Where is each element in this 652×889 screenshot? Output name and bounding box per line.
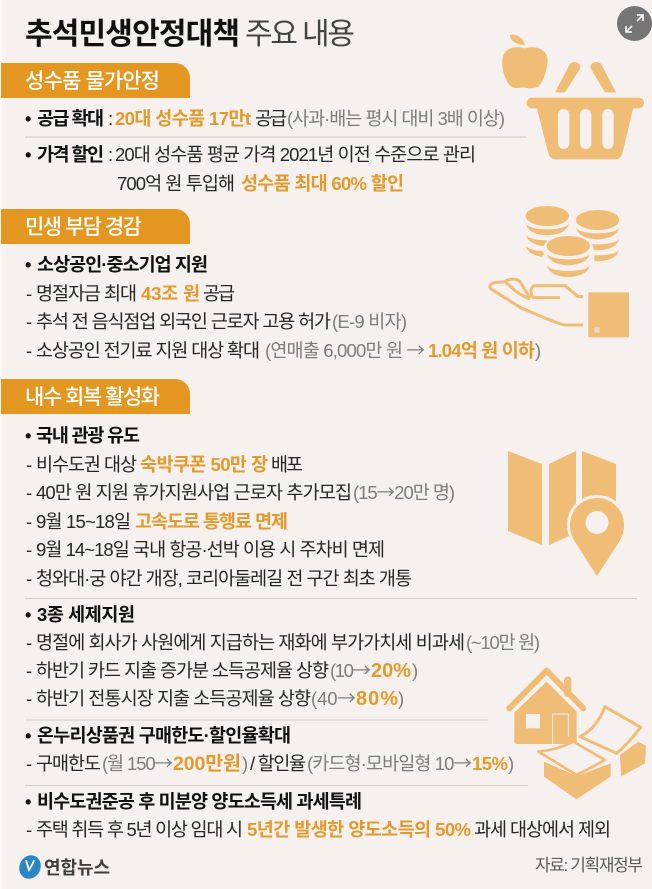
item: 공급 확대: 공급 확대	[37, 108, 104, 129]
item: 공급 확대: 공급	[255, 108, 287, 129]
icon: coins and hand	[490, 206, 629, 337]
item: 공급 확대: •	[25, 108, 31, 129]
item: 국내 관광 유도: 배포	[271, 454, 303, 475]
item: 국내 관광 유도: 청와대·궁 야간 개장, 코리아둘레길 전 구간 최초 개통	[36, 568, 412, 589]
section heading	[1, 209, 190, 244]
item: 소상공인·중소기업 지원: 추석 전 음식점업 외국인 근로자 고용 허가	[36, 311, 331, 332]
item: 온누리상품권: •	[25, 725, 31, 746]
panel: 민생 부담 경감	[1, 206, 629, 363]
item: 3종 세제지원: 명절에 회사가 사원에게 지급하는 재화에 부가가치세 비과세	[36, 632, 465, 653]
title: 주요 내용	[245, 18, 355, 51]
icon: house and documents	[509, 671, 646, 799]
item: 공급 확대: :	[108, 108, 113, 129]
item: 국내 관광 유도: 9월 14~18일 국내 항공·선박 이용 시 주차비 면제	[36, 539, 385, 560]
item: 소상공인·중소기업 지원: 소상공인 전기료 지원 대상 확대	[36, 340, 260, 361]
item: 비수도권 양도소득세 과세특례: -	[26, 819, 32, 840]
item: 국내 관광 유도: 비수도권 대상	[36, 454, 137, 475]
icon: apple and basket	[502, 35, 644, 159]
item: 온누리상품권: 온누리상품권 구매한도·할인율확대	[37, 725, 291, 746]
item: 온누리상품권	[25, 725, 514, 776]
item: 온누리상품권: (카드형·모바일형 10→	[307, 750, 472, 776]
panel: 성수품 물가안정	[1, 35, 644, 194]
panel: 내수 회복 활성화	[1, 379, 646, 840]
item: 국내 관광 유도: 40만 원 지원 휴가지원사업 근로자 추가모집	[36, 482, 352, 503]
item: 3종 세제지원: )	[398, 688, 404, 709]
item: 소상공인·중소기업 지원: (E-9 비자)	[332, 311, 407, 332]
item: 3종 세제지원: (10→	[330, 657, 371, 683]
item: 소상공인·중소기업 지원: 1.04억 원 이하	[428, 340, 535, 361]
item: 3종 세제지원: (~10만 원)	[466, 632, 540, 653]
item: 소상공인·중소기업 지원: •	[25, 254, 31, 275]
item: 비수도권 양도소득세 과세특례: 과세 대상에서 제외	[474, 819, 611, 840]
item: 국내 관광 유도: 9월 15~18일	[36, 511, 131, 532]
item: 소상공인·중소기업 지원: 소상공인·중소기업 지원	[37, 254, 208, 275]
item: 국내 관광 유도: 국내 관광 유도	[36, 425, 140, 446]
item: 국내 관광 유도: -	[26, 454, 32, 475]
icon: expand button	[617, 6, 652, 41]
item: 비수도권 양도소득세 과세특례: 주택 취득 후 5년 이상 임대 시	[36, 819, 243, 840]
item: 국내 관광 유도: 숙박쿠폰 50만 장	[140, 454, 268, 475]
item: 온누리상품권: 15%	[472, 753, 508, 774]
item: 공급 확대: 20대 성수품 17만t	[115, 108, 251, 129]
item: 비수도권 양도소득세 과세특례: 비수도권준공 후 미분양 양도소득세 과세특례	[37, 791, 362, 812]
item: 3종 세제지원: 3종 세제지원	[37, 604, 135, 625]
item: 가격 할인: 성수품 최대 60% 할인	[241, 173, 404, 194]
logo: 연합뉴스	[15, 852, 110, 882]
title: 추석민생안정대책	[25, 18, 240, 51]
item: 3종 세제지원: 하반기 전통시장 지출 소득공제율 상향	[36, 688, 311, 709]
title	[25, 18, 355, 51]
section heading: 내수 회복 활성화	[25, 386, 160, 409]
item: 온누리상품권: 구매한도	[36, 753, 101, 774]
item: 비수도권 양도소득세 과세특례: 5년간 발생한 양도소득의 50%	[247, 819, 471, 840]
item: 3종 세제지원: -	[26, 632, 32, 653]
item: 3종 세제지원: -	[26, 660, 32, 681]
item: 온누리상품권: (월 150→	[102, 750, 173, 776]
item: 3종 세제지원: 20%	[371, 660, 411, 682]
item: 공급 확대: (사과·배는 평시 대비 3배 이상)	[287, 108, 505, 129]
icon: map and pin	[508, 451, 627, 582]
item: 국내 관광 유도: -	[26, 539, 32, 560]
item: 소상공인·중소기업 지원: -	[26, 340, 32, 361]
item: 소상공인·중소기업 지원: -	[26, 311, 32, 332]
item: 3종 세제지원: (40→	[311, 685, 356, 711]
item: 소상공인·중소기업 지원: 명절자금 최대	[36, 283, 137, 304]
logo: 연합뉴스: 연합뉴스	[44, 858, 110, 878]
item: 소상공인·중소기업 지원: (연매출 6,000만 원 →	[265, 337, 425, 363]
item: 국내 관광 유도: -	[26, 511, 32, 532]
item: 3종 세제지원: -	[26, 688, 32, 709]
item: 온누리상품권: -	[26, 753, 32, 774]
item: 가격 할인: :	[108, 144, 113, 165]
item: 가격 할인: 20대 성수품 평균 가격 2021년 이전 수준으로 관리	[115, 144, 476, 165]
item: 온누리상품권: )	[508, 753, 514, 774]
item: 국내 관광 유도: 고속도로 통행료 면제	[135, 511, 288, 532]
item: 3종 세제지원: •	[25, 604, 31, 625]
item: 가격 할인	[25, 144, 476, 194]
item: 국내 관광 유도: (15→20만 명)	[353, 479, 455, 505]
section heading: 민생 부담 경감	[25, 216, 142, 239]
item: 소상공인·중소기업 지원	[25, 254, 541, 363]
item: 국내 관광 유도	[25, 425, 455, 589]
item: 비수도권 양도소득세 과세특례: •	[25, 791, 31, 812]
item: 국내 관광 유도: -	[26, 568, 32, 589]
item: 국내 관광 유도: -	[26, 482, 32, 503]
item: 가격 할인: 가격 할인	[37, 144, 104, 165]
item: 공급 확대	[25, 108, 505, 129]
source: 자료: 기획재정부	[535, 856, 643, 875]
section heading	[1, 63, 190, 98]
section heading: 성수품 물가안정	[25, 70, 160, 93]
section heading	[1, 379, 190, 414]
item: 온누리상품권: 200만원	[173, 753, 241, 775]
item: 소상공인·중소기업 지원: 공급	[203, 283, 235, 304]
item: 온누리상품권: )	[242, 753, 248, 774]
item: 소상공인·중소기업 지원: 43조 원	[141, 283, 200, 304]
item: 3종 세제지원: )	[412, 660, 418, 681]
item: 가격 할인: 700억 원 투입해	[117, 173, 235, 194]
item: 가격 할인: •	[25, 144, 31, 165]
item: 소상공인·중소기업 지원: -	[26, 283, 32, 304]
item: 국내 관광 유도: •	[25, 425, 31, 446]
item: 소상공인·중소기업 지원: )	[535, 340, 541, 361]
item: 3종 세제지원	[25, 604, 540, 711]
item: 3종 세제지원: 하반기 카드 지출 증가분 소득공제율 상향	[36, 660, 329, 681]
item: 3종 세제지원: 80%	[356, 688, 398, 710]
item: 온누리상품권: / 할인율	[250, 753, 306, 774]
item: 비수도권 양도소득세 과세특례	[25, 791, 611, 840]
